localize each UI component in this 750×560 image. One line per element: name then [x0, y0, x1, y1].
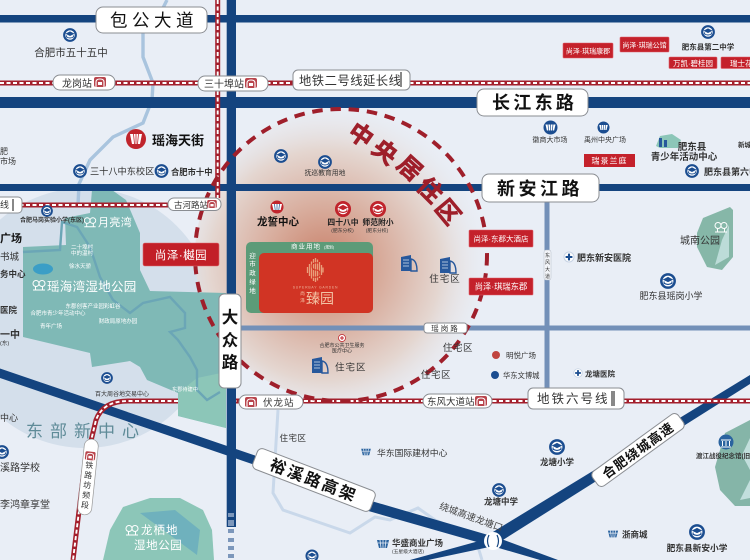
road label: dazhong road: 大 [222, 308, 238, 327]
road label: baogong avenue: 包公大道 [110, 10, 198, 30]
residential icon and label 3: 住宅区 [335, 362, 367, 374]
road label: dazhong road: 路 [222, 353, 239, 372]
park label: longqi wetland: 湿地公园 [134, 539, 182, 552]
school: xin'an primary [667, 525, 728, 553]
school: no.48 middle: 四十八中 [327, 217, 359, 227]
metro line label: left edge: 线 [0, 199, 9, 210]
road label: dazhong road [219, 294, 241, 388]
clipped left labels: 一中 [0, 328, 20, 341]
medical centre: 医疗中心 [332, 348, 352, 354]
project: yueyuan [143, 243, 219, 266]
shopping: yaohai street [126, 129, 204, 149]
red project panel [259, 253, 373, 313]
park: lower right memorial [715, 420, 750, 506]
school icon: near education land [275, 150, 287, 162]
residential label 5: 住宅区 [421, 369, 451, 381]
rivers [23, 0, 482, 560]
title: central living district [343, 118, 465, 231]
road label: yuxi elevated: 裕溪路高架 [267, 455, 360, 506]
road label: changjiang east road [477, 89, 588, 116]
project: ruijing lanting: 瑞景兰庭 [592, 156, 628, 166]
park: longqi wetland [103, 498, 214, 560]
text: ring expressway longtang exit: 绕城高速龙塘口 [438, 500, 504, 534]
project: qirui dongjun [469, 278, 533, 295]
metro station: dongfeng avenue [423, 394, 492, 408]
project: qirui dongjun: 尚泽·琪瑞东郡 [475, 282, 527, 292]
project: qirui gongguan [620, 37, 669, 52]
business centre [257, 200, 299, 228]
park label: chengnan park [680, 222, 727, 247]
main road dashed end [228, 513, 234, 558]
green belt panel: (规划) [324, 244, 335, 250]
road label: dongfeng avenue: 东 [545, 252, 550, 259]
lake [33, 264, 53, 274]
school: yaogang primary [639, 274, 703, 301]
dashed boundary circle [195, 109, 487, 401]
title: central living district: 居 [391, 151, 427, 187]
school: hefei no.10: 合肥市十中 [171, 167, 212, 177]
school: yaogang primary: 肥东县瑶岗小学 [639, 290, 703, 301]
school: xilu school [0, 446, 40, 474]
road label: dongfeng avenue: 道 [545, 273, 550, 280]
building materials centre: 华东国际建材中心 [377, 447, 448, 458]
school icon: bottom [306, 550, 318, 560]
metro label: line 6: 地铁六号线 [537, 392, 610, 406]
title: central living district: 中 [343, 118, 378, 154]
mingyue plaza: 明悦广场 [506, 350, 536, 360]
metro vertical label: 频 [82, 490, 91, 500]
market: huishang: 徽商大市场 [532, 135, 568, 144]
metro station: sanshibu [198, 76, 268, 91]
green belt panel: 政 [249, 268, 256, 277]
residential icon and label 2: 住宅区 [429, 273, 461, 285]
landmark: li hongzhang hall: 李鸿章享堂 [0, 498, 50, 511]
park small labels: 二十埠村 [71, 243, 93, 251]
project: vanke biguiyuan [669, 57, 717, 68]
school: no.48 middle [327, 202, 359, 234]
school: maogang primary [20, 206, 84, 224]
project: qirui kangjun [563, 43, 613, 58]
park small labels: 中的温村 [71, 249, 93, 257]
road label: dongfeng avenue: 大 [545, 266, 550, 273]
junction [484, 532, 502, 550]
residential icon 1 [401, 255, 417, 271]
red project panel: 尚 [300, 290, 305, 297]
business centre: 龙誓中心 [257, 215, 299, 228]
school: hefei no.10 [156, 165, 212, 177]
park label: chengnan park: 城南公园 [680, 234, 720, 247]
metro station: fulong [239, 395, 303, 409]
shopping: zheshang city: 浙商城 [622, 530, 648, 540]
school: normal affiliated primary [362, 202, 394, 234]
school: no.48 middle: (肥东分校) [331, 227, 354, 234]
clipped label: market: 肥 [0, 147, 8, 156]
hospital: longtang [574, 368, 615, 378]
clipped label: market: 市场 [0, 156, 16, 166]
project: swiss garden [721, 57, 750, 68]
metro station: guhe road: 古河路站 [174, 200, 209, 210]
market: huishang [532, 120, 568, 144]
residential label 4: 住宅区 [443, 342, 473, 354]
project: qirui kangjun: 尚泽·琪瑞康郡 [566, 46, 610, 56]
title: central living district: 央 [367, 135, 402, 171]
youth activity centre: 肥东县 [678, 141, 707, 153]
metro label: line 2 extension [293, 70, 410, 90]
park small labels: 徐水天骄 [69, 262, 91, 270]
school: feidong no.6 middle [686, 165, 750, 177]
clipped left labels [0, 231, 26, 347]
medical centre: 合肥市公共卫生服务 [319, 342, 365, 349]
park small labels: 东郡创客产业园彩虹谷 [65, 302, 121, 310]
school: feidong no.2 middle [682, 26, 735, 52]
park small labels [30, 243, 138, 330]
text: park construction note: 东郡待建中 [172, 385, 198, 393]
title: central living district: 住 [411, 173, 447, 209]
green belt panel: 市 [249, 259, 256, 268]
school: hefei no.55 [34, 29, 108, 59]
memorial: river crossing [696, 434, 750, 460]
park small labels: 青年广场 [40, 322, 62, 330]
project: dongjun hotel [469, 230, 533, 247]
metro station: longgang [53, 75, 115, 90]
metro vertical label: 段 [81, 499, 90, 510]
road label: changjiang east road: 长江东路 [492, 92, 577, 113]
school: xilu school: 溪路学校 [0, 461, 40, 474]
metro vertical label: 铁 [85, 460, 94, 470]
park label: yaohai bay wetland: 瑶海湾湿地公园 [47, 279, 137, 294]
road label: baogong avenue [96, 7, 207, 33]
plaza: yuzhou [584, 122, 626, 144]
residential icon and label 3 [312, 357, 367, 374]
road label: dongfeng avenue: 风 [545, 260, 550, 266]
hospital: longtang: 龙塘医院 [585, 368, 615, 378]
school: maogang primary: 合肥马岗实验小学(东区) [20, 216, 84, 224]
shopping: yaohai street: 瑶海天街 [152, 133, 204, 148]
mingyue plaza [492, 350, 536, 360]
secondary roads [236, 190, 750, 400]
road label: yaogang road [424, 323, 467, 333]
road label: hefei ring expressway: 合肥绕城高速 [599, 419, 677, 482]
metro station: sanshibu: 三十埠站 [204, 78, 244, 90]
road label: yaogang road: 瑶岗路 [431, 323, 460, 333]
text: east new centre: 东部新中心 [26, 422, 146, 441]
shopping: huasheng plaza: (五星级大酒店) [392, 548, 424, 555]
school: xin'an primary: 肥东县新安小学 [667, 542, 728, 553]
red project panel: SUPERBAY GARDEN [293, 286, 338, 290]
metro vertical label: 路 [84, 470, 93, 480]
residential label 6: 住宅区 [279, 433, 307, 443]
park small labels: 合肥市青少年活动中心 [30, 309, 86, 317]
metro label: line 2 extension: 地铁二号线延长线 [299, 74, 401, 88]
project: qirui gongguan: 尚泽·琪瑞公馆 [622, 40, 667, 50]
school: normal affiliated primary: 师范附小 [362, 217, 394, 227]
clipped left labels: 医院 [0, 305, 18, 315]
school: normal affiliated primary: (肥东分校) [366, 227, 389, 234]
shopping: zheshang city [608, 530, 648, 540]
metro vertical label: 坊 [83, 480, 92, 490]
metro label: line 6 [528, 388, 624, 409]
metro station: longgang: 龙岗站 [62, 77, 92, 90]
road label: yuxi elevated [251, 447, 377, 513]
green belt panel: 迎 [249, 251, 256, 260]
project: vanke biguiyuan: 万凯·碧桂园 [673, 58, 713, 68]
title: central living district: 区 [429, 195, 465, 231]
central living district glow [195, 109, 487, 401]
school icon: baida [102, 373, 112, 383]
school: no.38 east campus: 三十八中东校区 [90, 166, 154, 176]
project: ruijing lanting [584, 154, 635, 167]
green belt panel: 商业用地 [291, 242, 321, 250]
park: chengnan [697, 207, 733, 270]
education land: 抚巡教育用地 [305, 168, 346, 177]
park label: moon bay [84, 215, 132, 229]
shopping: huasheng plaza [377, 538, 444, 555]
residential icon and label 2 [429, 257, 461, 285]
road label: hefei ring expressway [590, 412, 686, 488]
school: hefei no.55: 合肥市五十五中 [34, 46, 108, 59]
park small labels: 财政局原地办园 [99, 317, 138, 325]
project: dongjun hotel: 尚泽·东郡大酒店 [474, 234, 529, 244]
school: feidong no.2 middle: 肥东县第二中学 [682, 42, 735, 52]
green belt panel: 地 [249, 286, 256, 295]
red project panel: 臻 [306, 290, 320, 306]
metro station: guhe road [168, 198, 221, 210]
youth activity centre [651, 134, 718, 163]
medical centre [319, 334, 365, 354]
road label: dazhong road: 众 [222, 331, 238, 350]
green belt panel: 绿 [249, 277, 256, 286]
metro station: fulong: 伏龙站 [263, 397, 295, 409]
school: longtang primary: 龙塘小学 [540, 457, 574, 467]
park label: longqi wetland: 龙栖地 [141, 523, 178, 537]
road label: xin'anjiang road: 新安江路 [497, 178, 583, 199]
clipped left labels: 广场 [0, 231, 22, 245]
school: longtang primary [540, 440, 574, 467]
clipped left labels: 书城 [0, 252, 20, 263]
plaza: yuzhou: 禹州中央广场 [584, 135, 626, 144]
metro vertical label [77, 438, 99, 516]
school: longtang middle [484, 484, 518, 506]
project site block [246, 242, 373, 313]
green belt panel [246, 242, 373, 313]
park label: moon bay: 月亮湾 [98, 215, 132, 229]
district circle: east new centre [0, 188, 215, 448]
hospital: feidong xin'an: 肥东新安医院 [577, 252, 631, 263]
metro line label: left edge [0, 197, 22, 213]
clipped left label: centre: 中心 [0, 412, 18, 423]
huadong wenbo city: 华东文博城 [503, 371, 540, 380]
metro station: dongfeng avenue: 东风大道站 [427, 396, 475, 408]
wetland park area [23, 190, 226, 428]
shopping: huasheng plaza: 华盛商业广场 [392, 538, 444, 548]
clipped left labels: 务中心 [0, 269, 26, 279]
project: yueyuan: 尚泽·樾园 [155, 248, 207, 262]
road label: xin'anjiang road [482, 174, 599, 202]
red project panel: 园 [320, 290, 334, 306]
red project panel: 泽 [300, 297, 305, 304]
clipped label: market [0, 147, 16, 166]
education land [305, 156, 346, 177]
school: no.38 east campus [74, 165, 154, 177]
road label: dongfeng avenue [544, 250, 551, 280]
clipped left labels: (东) [0, 339, 9, 347]
text: baida trade centre: 百大周谷地交易中心 [95, 390, 149, 398]
park label: longqi wetland [126, 523, 182, 552]
youth activity centre: 青少年活动中心 [651, 151, 718, 163]
school: longtang middle: 龙塘中学 [484, 496, 518, 506]
